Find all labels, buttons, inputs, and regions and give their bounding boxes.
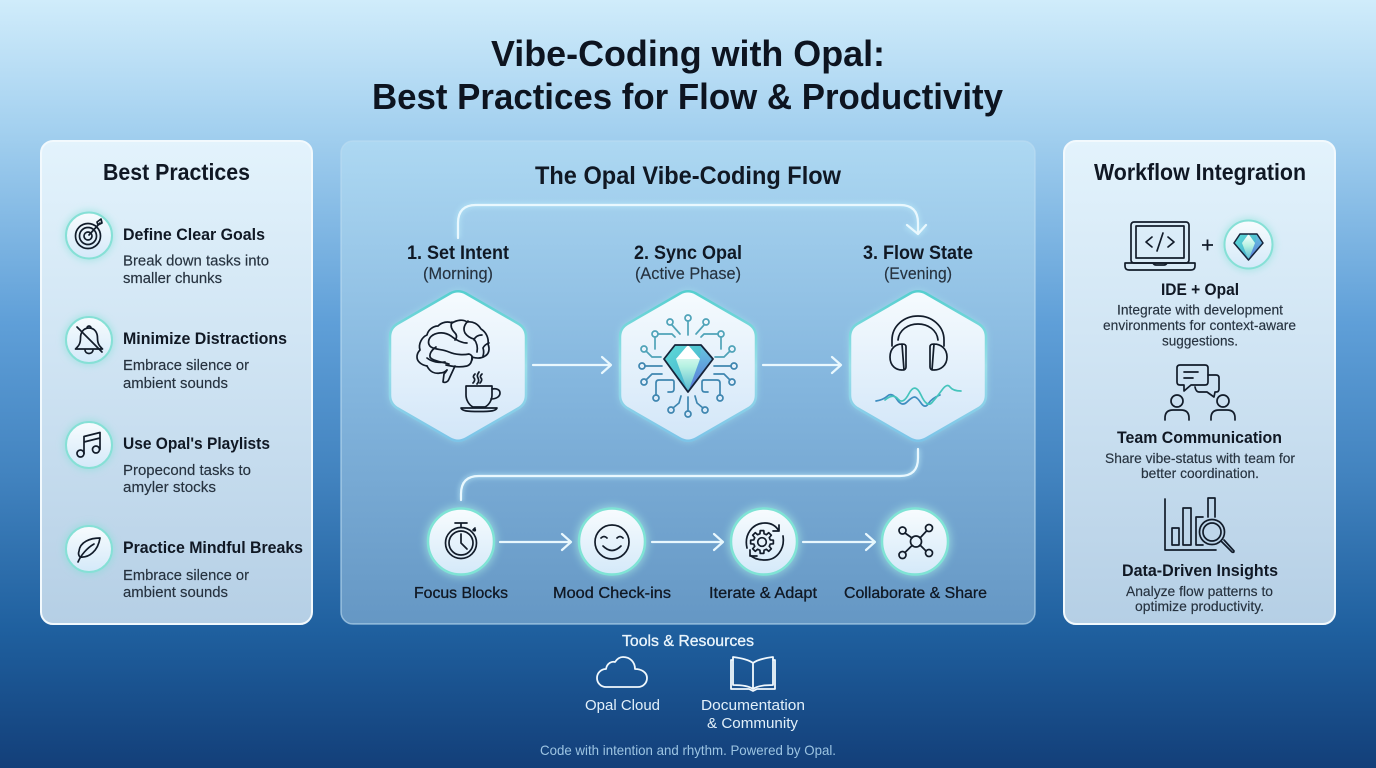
block: data-driven insights: optimize productivity. bbox=[1135, 598, 1264, 614]
step 3 label bbox=[863, 242, 973, 283]
panel: best practices bbox=[41, 141, 312, 624]
label: iterate and adapt: Iterate & Adapt bbox=[709, 585, 818, 602]
panel: workflow integration bbox=[1064, 141, 1335, 624]
arrow: iterate to collaborate bbox=[803, 534, 875, 550]
arrow: step 2 to step 3 bbox=[763, 357, 841, 373]
icon: muted bell bbox=[76, 326, 102, 354]
block: ide + opal: suggestions. bbox=[1162, 332, 1238, 348]
plus sign bbox=[1202, 240, 1213, 250]
hexagon 3 bbox=[850, 291, 986, 441]
icon: brain bbox=[417, 320, 489, 382]
item: minimize distractions: Embrace silence or bbox=[123, 358, 249, 374]
label: documentation and community: & Community bbox=[707, 716, 799, 732]
hexagon 2 bbox=[620, 291, 756, 441]
icon: music notes bbox=[77, 432, 100, 457]
item: define clear goals: Define Clear Goals bbox=[123, 225, 265, 244]
icon: coffee cup bbox=[461, 372, 500, 412]
block: team communication: Team Communication bbox=[1117, 428, 1282, 447]
item: use opal's playlists bbox=[64, 420, 270, 496]
hexagon 1 bbox=[390, 291, 526, 441]
arrow: mood to iterate bbox=[652, 534, 723, 550]
item: minimize distractions: Minimize Distractions bbox=[123, 329, 287, 348]
footer tagline: Code with intention and rhythm. Powered by Opal. bbox=[540, 742, 836, 758]
icon: laptop with code bbox=[1125, 222, 1195, 270]
node: iterate and adapt bbox=[709, 506, 818, 602]
title: Best Practices for Flow & Productivity bbox=[372, 76, 1003, 117]
label: documentation and community: Documentation bbox=[701, 698, 805, 714]
block: data-driven insights: Analyze flow patterns to bbox=[1126, 583, 1273, 599]
icon: opal gem badge bbox=[1222, 218, 1274, 270]
block: data-driven insights bbox=[1122, 561, 1278, 614]
icon: chart with magnifier bbox=[1165, 498, 1234, 552]
heading: best practices: Best Practices bbox=[103, 159, 250, 185]
icon: cloud bbox=[597, 657, 647, 687]
item: use opal's playlists: Propecond tasks to bbox=[123, 463, 251, 479]
label: mood check-ins: Mood Check-ins bbox=[553, 585, 671, 602]
block: team communication: better coordination. bbox=[1141, 465, 1259, 481]
node: collaborate and share bbox=[844, 506, 987, 602]
item: minimize distractions: ambient sounds bbox=[123, 376, 228, 392]
item: use opal's playlists: amyler stocks bbox=[123, 480, 216, 496]
icon: smiley bbox=[595, 525, 629, 559]
item: practice mindful breaks: ambient sounds bbox=[123, 585, 228, 601]
step 1 label: 1. Set Intent bbox=[407, 242, 509, 264]
block: ide + opal: IDE + Opal bbox=[1161, 280, 1239, 299]
icon: network nodes bbox=[899, 524, 932, 558]
label: focus blocks: Focus Blocks bbox=[414, 585, 508, 602]
section: tools and resources bbox=[585, 633, 805, 732]
icon: headphones bbox=[890, 316, 947, 370]
icon: team chat bbox=[1165, 365, 1235, 420]
block: ide + opal: environments for context-aware bbox=[1103, 317, 1296, 333]
step 3 label: (Evening) bbox=[884, 265, 952, 283]
title: Vibe-Coding with Opal: bbox=[491, 33, 885, 74]
icon: stopwatch bbox=[446, 523, 476, 558]
item: use opal's playlists: Use Opal's Playlists bbox=[123, 434, 270, 453]
icon: circuit lines bbox=[639, 315, 737, 417]
icon: open book bbox=[731, 657, 775, 691]
arrow: connector from flow state to focus blocks bbox=[461, 449, 918, 501]
node: focus blocks bbox=[414, 506, 508, 602]
arrow: step 1 to step 2 bbox=[533, 357, 611, 373]
item: minimize distractions bbox=[64, 315, 287, 392]
step 2 label bbox=[634, 242, 742, 283]
panel: the opal vibe-coding flow bbox=[341, 141, 1035, 624]
step 2: sync opal bbox=[620, 242, 756, 441]
arrow: loop from step 1 to step 3 bbox=[458, 205, 926, 238]
step 1: set intent bbox=[390, 242, 526, 441]
item: practice mindful breaks: Embrace silence or bbox=[123, 568, 249, 584]
step 3 label: 3. Flow State bbox=[863, 242, 973, 264]
block: team communication: Share vibe-status with team for bbox=[1105, 450, 1295, 466]
title bbox=[372, 33, 1003, 117]
arrow: focus to mood bbox=[500, 534, 571, 550]
icon: target bbox=[76, 219, 102, 248]
item: define clear goals bbox=[64, 210, 269, 287]
heading: workflow integration: Workflow Integration bbox=[1094, 159, 1306, 185]
block: ide + opal: Integrate with development bbox=[1117, 302, 1283, 318]
item: practice mindful breaks bbox=[64, 524, 303, 601]
icon: leaf bbox=[78, 538, 100, 562]
label: documentation and community bbox=[701, 698, 805, 732]
icon: sound wave bbox=[876, 386, 961, 406]
step 2 label: 2. Sync Opal bbox=[634, 242, 742, 264]
item: practice mindful breaks: Practice Mindful Breaks bbox=[123, 538, 303, 557]
step 3: flow state bbox=[850, 242, 986, 441]
icon: gear with cycle arrows bbox=[746, 523, 783, 560]
icon: opal gem bbox=[664, 345, 713, 392]
block: team communication bbox=[1105, 428, 1295, 481]
step 2 label: (Active Phase) bbox=[635, 265, 741, 283]
node: mood check-ins bbox=[553, 506, 671, 602]
heading: flow: The Opal Vibe-Coding Flow bbox=[535, 162, 842, 190]
label: opal cloud: Opal Cloud bbox=[585, 698, 660, 714]
item: define clear goals: Break down tasks into bbox=[123, 254, 269, 270]
block: data-driven insights: Data-Driven Insights bbox=[1122, 561, 1278, 580]
label: collaborate and share: Collaborate & Share bbox=[844, 585, 987, 602]
item: define clear goals: smaller chunks bbox=[123, 271, 222, 287]
block: ide + opal bbox=[1103, 280, 1296, 348]
step 1 label bbox=[407, 242, 509, 283]
step 1 label: (Morning) bbox=[423, 265, 493, 283]
heading: tools and resources: Tools & Resources bbox=[622, 633, 754, 650]
